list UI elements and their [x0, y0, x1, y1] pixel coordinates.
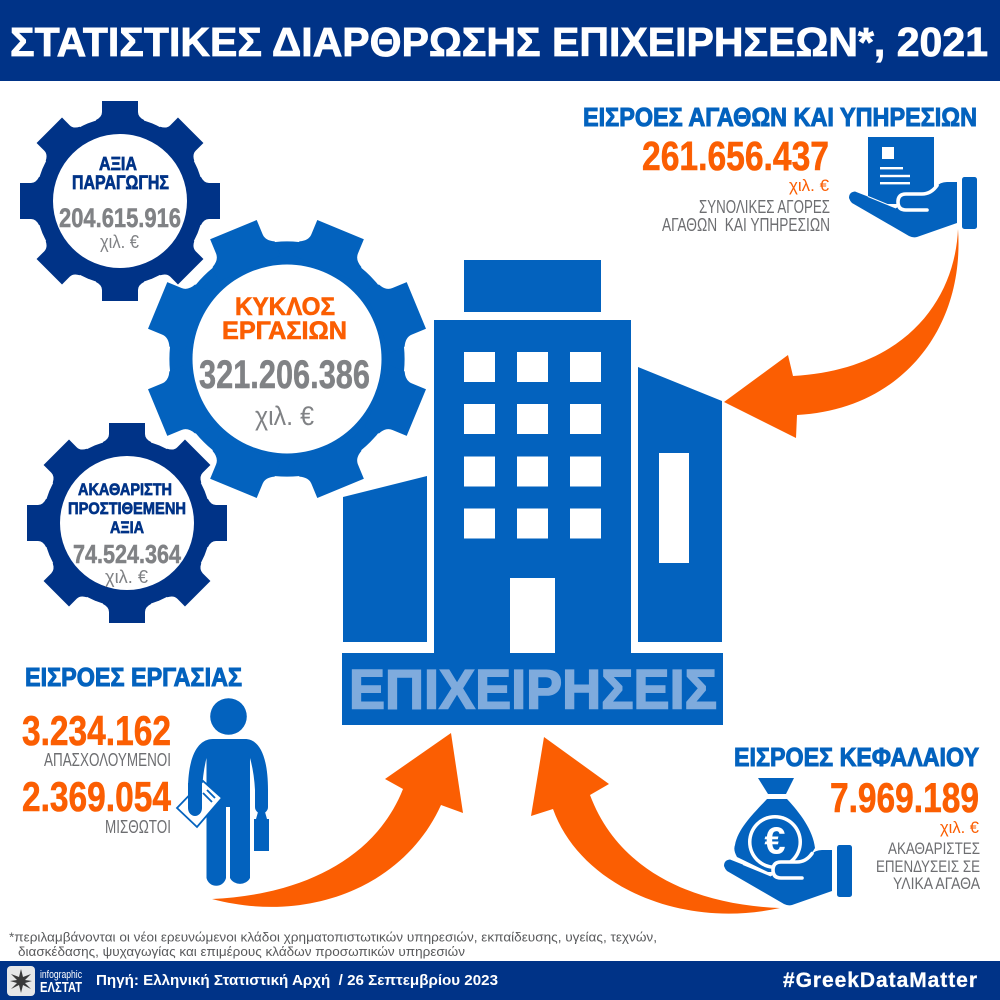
panel: goods and services inflows: ΑΓΑΘΩΝ ΚΑΙ ΥΠΗΡΕΣΙΩΝ — [662, 215, 830, 235]
panel: labour inflows: ΕΙΣΡΟΕΣ ΕΡΓΑΣΙΑΣ — [25, 662, 242, 692]
panel: capital inflows — [734, 742, 981, 893]
title: ΣΤΑΤΙΣΤΙΚΕΣ ΔΙΑΡΘΡΩΣΗΣ ΕΠΙΧΕΙΡΗΣΕΩΝ*, 2021 — [10, 19, 988, 65]
panel: capital inflows: ΕΙΣΡΟΕΣ ΚΕΦΑΛΑΙΟΥ — [734, 742, 979, 772]
panel: capital inflows: ΥΛΙΚΑ ΑΓΑΘΑ — [893, 874, 981, 893]
gear: αξία παραγωγής: 204.615.916 — [59, 203, 181, 233]
arrow: capital inflow — [531, 737, 780, 914]
gear: ακαθάριστη προστιθέμενη αξία: 74.524.364 — [73, 539, 181, 569]
gear: κύκλος εργασιών: ΕΡΓΑΣΙΩΝ — [222, 317, 347, 345]
building label: ΕΠΙΧΕΙΡΗΣΕΙΣ — [349, 658, 717, 720]
panel: goods and services inflows: ΣΥΝΟΛΙΚΕΣ ΑΓΟΡΕΣ — [699, 197, 830, 217]
source line: Πηγή: Ελληνική Στατιστική Αρχή / 26 Σεπτεμβρίου 2023 — [96, 972, 498, 989]
gear: κύκλος εργασιών: ΚΥΚΛΟΣ — [235, 293, 335, 321]
panel: labour inflows — [22, 662, 242, 837]
gear: ακαθάριστη προστιθέμενη αξία: ΑΞΙΑ — [110, 518, 144, 537]
gear: αξία παραγωγής: ΠΑΡΑΓΩΓΗΣ — [72, 173, 169, 194]
header band — [0, 0, 1000, 81]
icon: money bag on hand: € — [764, 820, 786, 862]
gear: ακαθάριστη προστιθέμενη αξία: χιλ. € — [105, 567, 148, 587]
panel: goods and services inflows: 261.656.437 — [642, 133, 829, 179]
footnote — [9, 930, 657, 959]
building — [342, 260, 723, 725]
panel: labour inflows: 3.234.162 — [22, 707, 171, 754]
arrow: labour inflow — [212, 733, 463, 907]
panel: labour inflows: 2.369.054 — [22, 773, 172, 820]
icon: ELSTAT logo: ΕΛΣΤΑΤ — [40, 979, 82, 996]
gear: κύκλος εργασιών: 321.206.386 — [199, 353, 370, 397]
gear: ακαθάριστη προστιθέμενη αξία: ΠΡΟΣΤΙΘΕΜΕΝΗ — [68, 499, 186, 518]
icon: money bag on hand — [724, 778, 852, 905]
icon: ELSTAT logo: infographic — [40, 969, 82, 981]
icon: ELSTAT logo — [7, 966, 82, 996]
panel: capital inflows: χιλ. € — [940, 818, 980, 837]
footnote: *περιλαμβάνονται οι νέοι ερευνώμενοι κλάδοι χρηματοπιστωτικών υπηρεσιών, εκπαίδευσης, υγείας, τεχνών, — [9, 930, 657, 944]
icon: employee with briefcase — [177, 698, 269, 886]
panel: labour inflows: ΑΠΑΣΧΟΛΟΥΜΕΝΟΙ — [44, 750, 171, 770]
gear: ακαθάριστη προστιθέμενη αξία — [27, 423, 227, 623]
panel: goods and services inflows — [583, 102, 977, 235]
panel: goods and services inflows: χιλ. € — [789, 176, 830, 195]
gear: αξία παραγωγής — [20, 101, 220, 301]
gear: αξία παραγωγής: ΑΞΙΑ — [99, 154, 137, 174]
footer band — [0, 961, 1000, 1000]
gear: αξία παραγωγής: χιλ. € — [100, 232, 139, 252]
icon: document on hand — [849, 137, 977, 237]
hashtag: #GreekDataMatter — [783, 969, 977, 992]
arrow: goods inflow — [724, 229, 959, 438]
footnote: διασκέδασης, ψυχαγωγίας και επιμέρους κλάδων προσωπικών υπηρεσιών — [18, 944, 465, 959]
gear: ακαθάριστη προστιθέμενη αξία: ΑΚΑΘΑΡΙΣΤΗ — [78, 480, 172, 499]
gear: κύκλος εργασιών — [104, 176, 470, 542]
panel: labour inflows: ΜΙΣΘΩΤΟΙ — [105, 817, 171, 837]
gear: κύκλος εργασιών: χιλ. € — [255, 401, 314, 431]
